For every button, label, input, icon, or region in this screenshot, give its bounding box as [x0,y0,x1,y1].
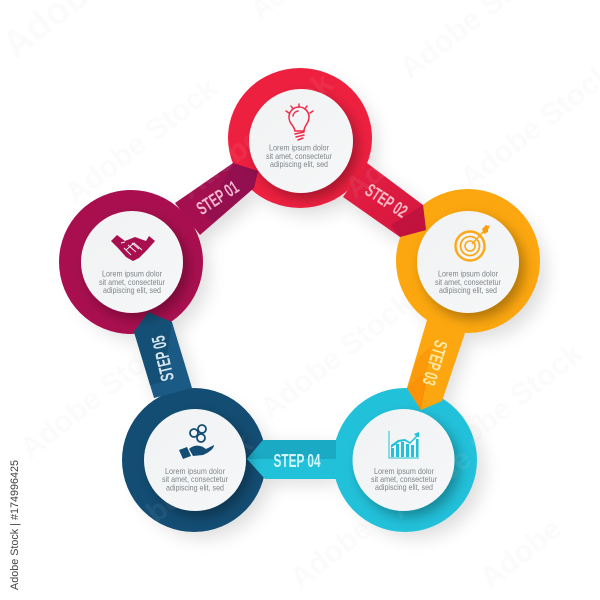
text: step 4 lorem: adipiscing elit, sed [375,482,433,492]
text: step 5 lorem [162,466,228,492]
overlay watermark [94,66,549,566]
background watermark: Adobe [474,512,568,596]
overlay watermark: Adobe Stock [94,426,259,566]
icon: bar chart with trend arrow [389,431,419,458]
ring: step 2 red [228,68,372,208]
background watermark: Adobe Stock [59,71,224,211]
label: step 2: STEP 02 [362,179,412,222]
text: step 5 lorem: adipiscing elit, sed [166,482,224,492]
text: step 3 lorem: adipiscing elit, sed [439,285,497,295]
soft ground shadows [73,79,546,538]
arrow: step 3 [407,320,465,410]
text: step 3 lorem [435,269,501,295]
background watermark: Adobe Stock [424,336,589,476]
ring: step 4 teal [333,388,477,532]
background watermark: Adobe Stock [14,326,179,466]
disc: step 3 orange [417,211,519,313]
text: step 2 lorem [266,142,332,169]
label: step 3: STEP 03 [418,338,452,388]
background watermark: Adobe Stock [254,286,419,426]
icon: handshake [111,235,155,261]
text: step 3 lorem: Lorem ipsum dolor [438,269,498,279]
overlay watermark: Adobe Stock [174,66,339,206]
label: step 5: STEP 05 [147,334,178,383]
icon: target with arrow [456,225,490,260]
overlay watermark: Adobe Stock [339,66,504,206]
text: step 1 lorem: sit amet, consectetur [99,277,165,287]
text: step 5 lorem: sit amet, consectetur [162,474,228,484]
icon: hand holding gears [179,425,214,459]
text: step 2 lorem: adipiscing elit, sed [270,159,328,169]
text: step 1 lorem: adipiscing elit, sed [103,285,161,295]
arrow: step 2 [343,163,426,237]
disc: step 2 red [249,89,353,193]
arrow: step 4 [247,440,336,479]
text: step 2 lorem: Lorem ipsum dolor [269,142,329,152]
label: step 4: STEP 04 [274,450,321,471]
text: step 1 lorem [99,269,165,295]
disc: step 4 teal [352,409,454,511]
arrow: step 5 [134,312,192,398]
ring: step 3 orange [396,189,540,333]
text: step 2 lorem: sit amet, consectetur [266,151,332,161]
disc: step 5 navy [144,409,246,511]
overlay watermark: Adobe Stock [384,386,549,526]
text: step 3 lorem: sit amet, consectetur [435,277,501,287]
icon: light bulb [286,104,313,140]
text: step 1 lorem: Lorem ipsum dolor [102,269,162,279]
ring: step 5 navy [122,388,266,532]
label: step 1: STEP 01 [192,176,242,219]
vertical credit text: Adobe Stock | #174996425 [9,460,21,590]
background watermark: Adobe Stock [284,456,449,596]
disc: step 1 purple [81,211,183,313]
text: step 4 lorem [371,466,437,492]
arrow: step 1 [175,163,258,235]
text: step 4 lorem: sit amet, consectetur [371,474,437,484]
text: step 5 lorem: Lorem ipsum dolor [165,466,225,476]
ring: step 1 purple [59,190,203,334]
text: step 4 lorem: Lorem ipsum dolor [374,466,434,476]
